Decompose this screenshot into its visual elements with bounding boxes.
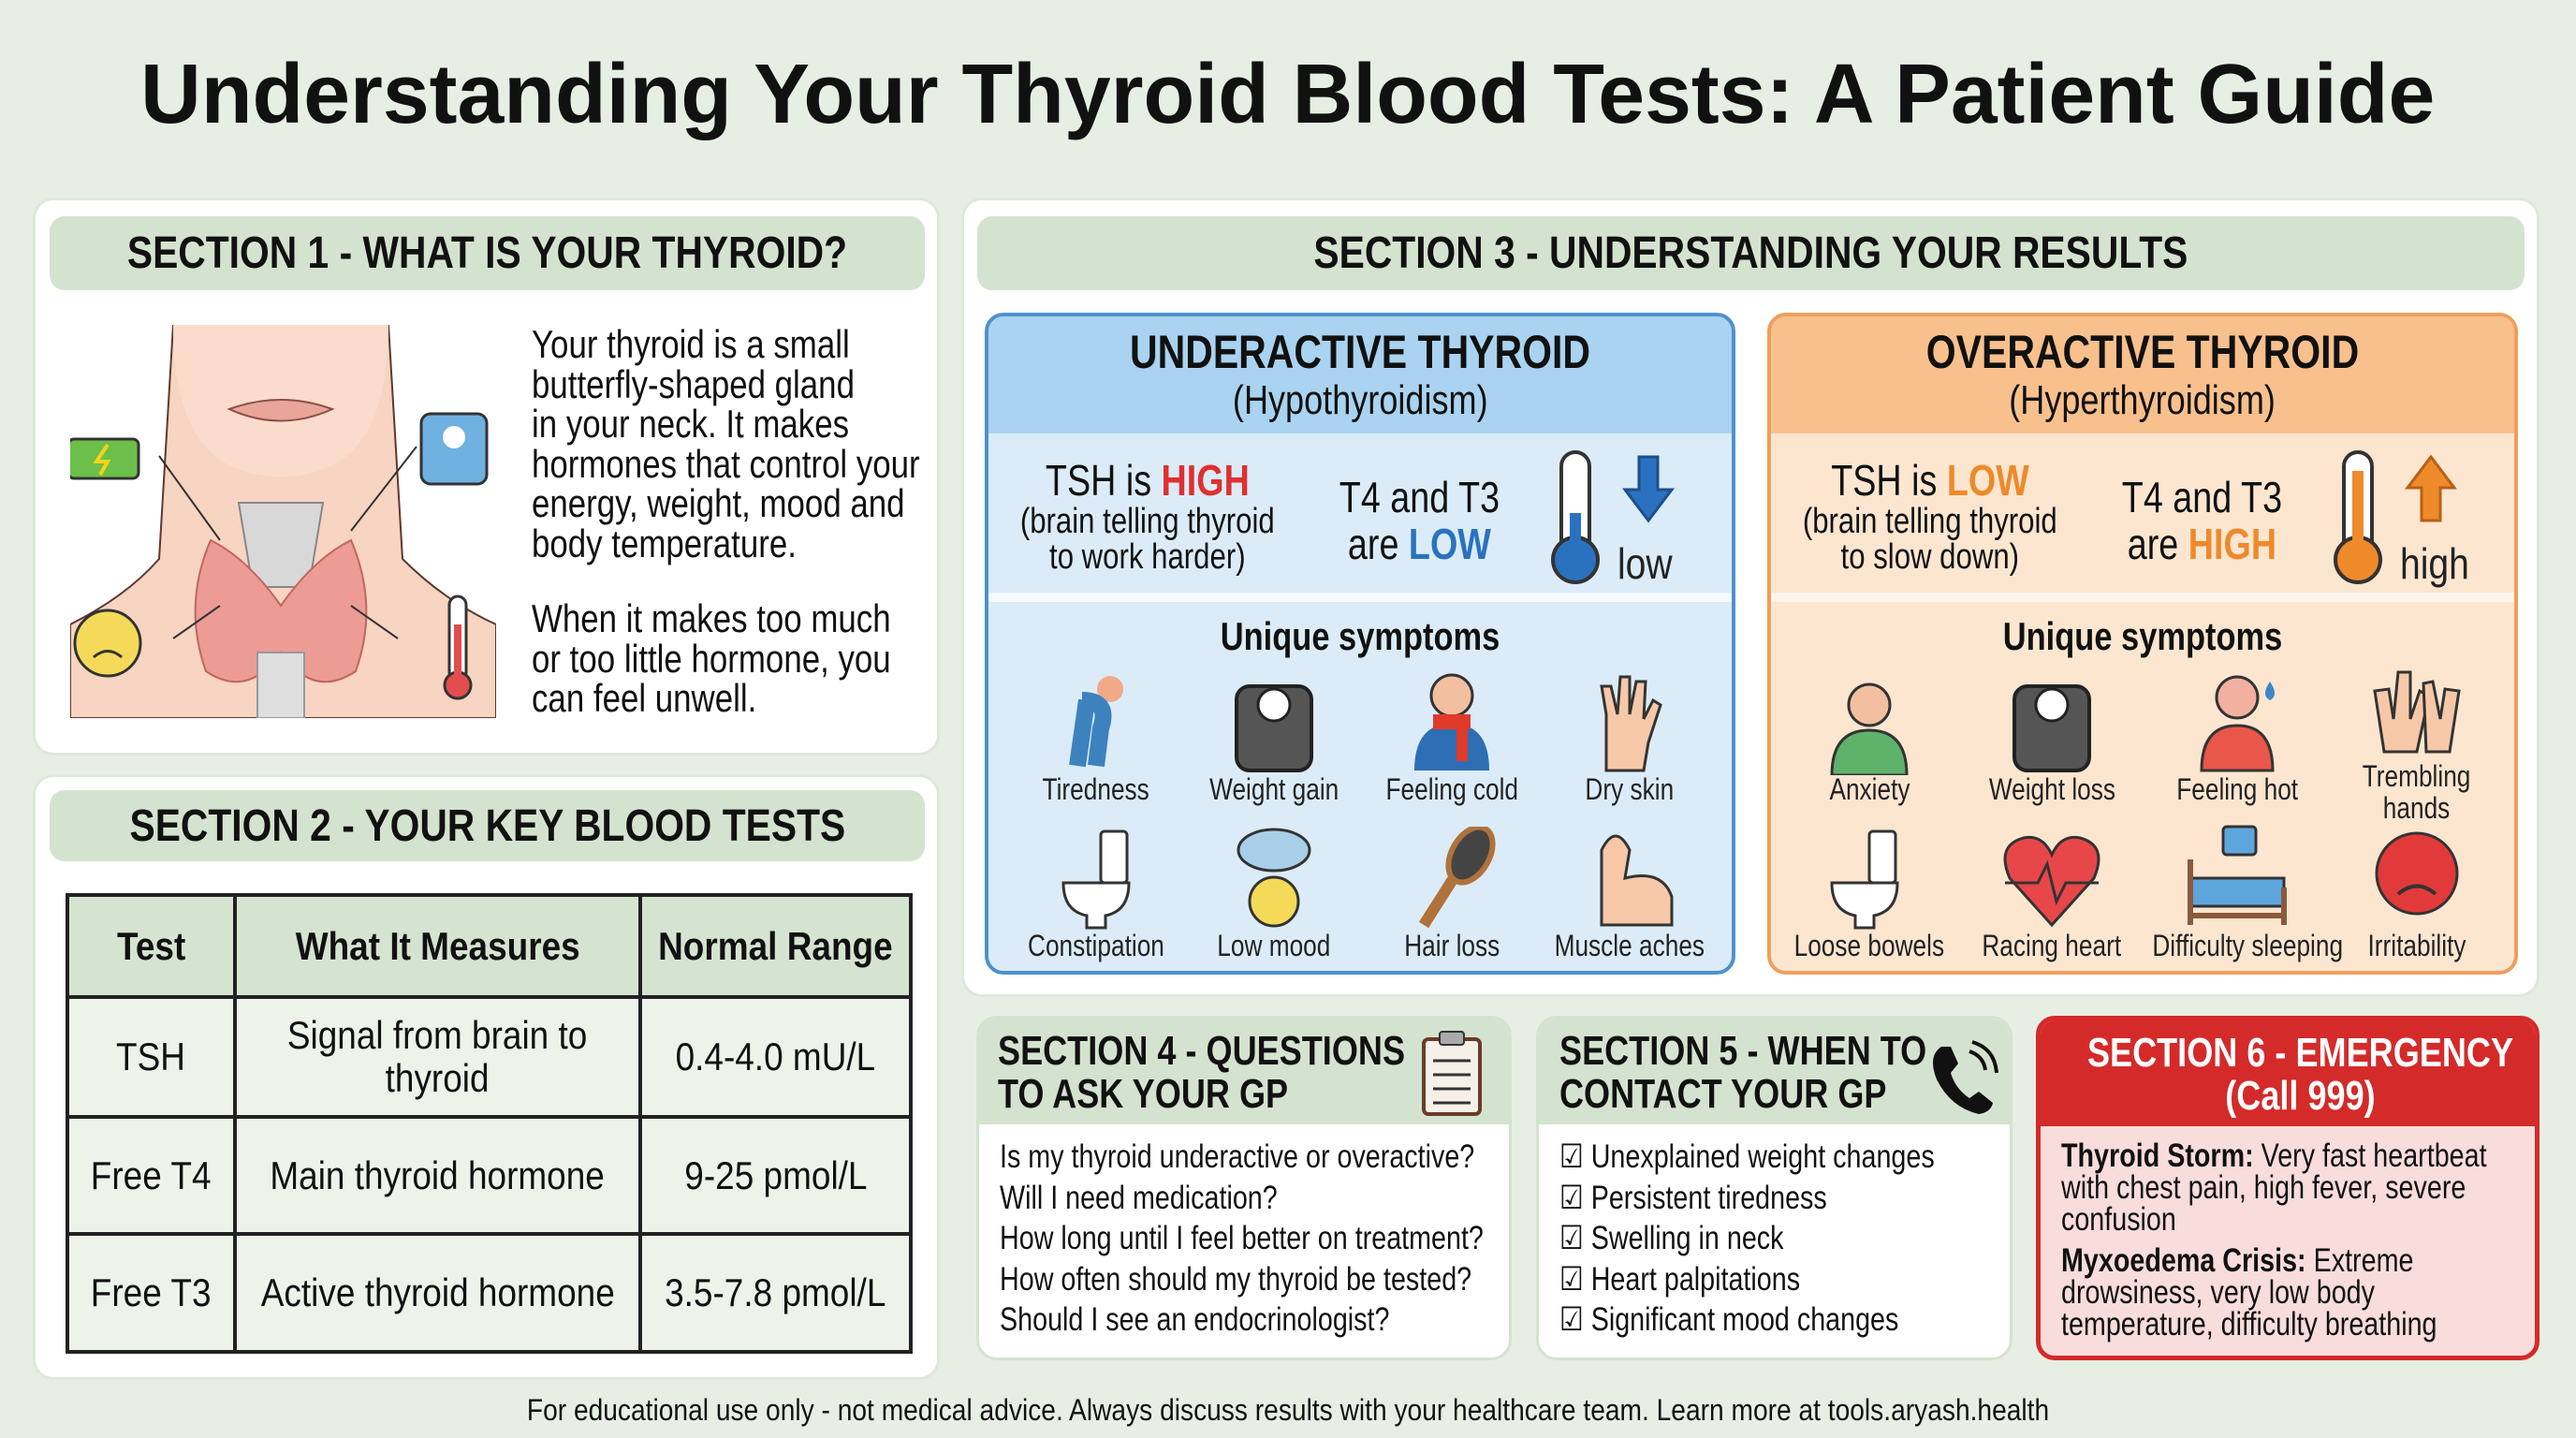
icon: thermometer low with arrow: [1551, 450, 1675, 588]
heading: section 6: SECTION 6 - EMERGENCY: [2087, 1030, 2513, 1076]
list: warning checklist: [1559, 1138, 1935, 1338]
heading: section 5: SECTION 5 - WHEN TO: [1559, 1028, 1926, 1074]
text: questions list: How often should my thyroid be tested?: [1000, 1260, 1471, 1298]
text: TSH low: [1803, 456, 2057, 577]
panel: overactive thyroid: [1767, 313, 2518, 975]
heading: overactive: (Hyperthyroidism): [2010, 377, 2276, 423]
heading: section 1: SECTION 1 - WHAT IS YOUR THYROID?: [127, 228, 847, 278]
panel: section 3: [961, 198, 2539, 997]
heading: unique symptoms: Unique symptoms: [2003, 614, 2282, 658]
icons: underactive symptoms: Muscle aches: [1555, 929, 1705, 962]
text: thyroid description: in your neck. It makes: [532, 402, 849, 446]
text: T4 T3 high: T4 and T3: [2121, 473, 2282, 521]
icons: overactive symptoms: hands: [2383, 791, 2451, 825]
panel: section 5 contact GP: [1536, 1016, 2012, 1360]
text: thyroid description: hormones that control your: [532, 442, 920, 485]
icons: overactive symptoms: [1794, 670, 2471, 962]
table: blood tests: Free T4: [91, 1153, 212, 1196]
list: warning checklist: ☑ Significant mood changes: [1559, 1301, 1898, 1338]
table: blood tests: What It Measures: [296, 923, 579, 968]
text: thyroid description: can feel unwell.: [532, 676, 756, 720]
heading: unique symptoms: Unique symptoms: [1221, 614, 1500, 658]
panel: section 4 questions: [976, 1016, 1512, 1360]
icons: underactive symptoms: Dry skin: [1586, 772, 1674, 806]
text: emergencies: with chest pain, high fever, severe: [2061, 1169, 2466, 1206]
table: blood tests: Normal Range: [658, 923, 893, 968]
text: emergencies: Thyroid Storm: Very fast heartbeat: [2061, 1137, 2487, 1174]
table: blood tests: TSH: [116, 1034, 185, 1078]
heading: underactive: UNDERACTIVE THYROID: [1130, 326, 1590, 378]
text: thyroid description: Your thyroid is a small: [532, 322, 850, 366]
heading: section 3: [977, 216, 2525, 290]
heading: section 5: CONTACT YOUR GP: [1559, 1071, 1886, 1117]
heading: section 1: [50, 216, 925, 290]
table: blood tests: [66, 893, 913, 1354]
icon: phone: [1933, 1040, 1998, 1114]
text: thyroid description: energy, weight, mood and: [532, 481, 905, 525]
text: thyroid description: When it makes too much: [532, 596, 891, 640]
icons: overactive symptoms: Weight loss: [1988, 772, 2115, 806]
text: questions list: Should I see an endocrinologist?: [1000, 1301, 1389, 1338]
list: warning checklist: ☑ Unexplained weight changes: [1559, 1138, 1935, 1175]
heading: section 4: SECTION 4 - QUESTIONS: [998, 1028, 1405, 1074]
icons: overactive symptoms: Feeling hot: [2176, 772, 2298, 806]
text: TSH high: [1020, 456, 1275, 577]
icon: thermometer high with arrow: [2334, 450, 2469, 588]
heading: section 4: TO ASK YOUR GP: [998, 1071, 1288, 1117]
list: warning checklist: ☑ Heart palpitations: [1559, 1260, 1800, 1298]
heading: underactive: (Hypothyroidism): [1233, 377, 1487, 423]
panel: underactive thyroid: [985, 313, 1735, 975]
list: warning checklist: ☑ Persistent tiredness: [1559, 1180, 1827, 1215]
icons: overactive symptoms: Difficulty sleeping: [2152, 929, 2343, 962]
text: questions list: Will I need medication?: [1000, 1180, 1278, 1215]
heading: section 4: [979, 1019, 1509, 1124]
illustration: neck and thyroid: [70, 325, 496, 718]
heading: overactive: [1771, 316, 2514, 433]
table: blood tests: Active thyroid hormone: [260, 1270, 614, 1314]
text: emergencies: drowsiness, very low body: [2061, 1274, 2375, 1311]
text: questions list: Is my thyroid underactive or overactive?: [1000, 1138, 1474, 1175]
heading: overactive: OVERACTIVE THYROID: [1926, 326, 2359, 378]
heading: section 6: (Call 999): [2225, 1073, 2376, 1119]
heading: section 2: [50, 790, 925, 861]
text: questions list: How long until I feel better on treatment?: [1000, 1220, 1484, 1256]
text: T4 T3 low: are LOW: [1348, 520, 1490, 568]
text: T4 T3 high: [2121, 473, 2282, 568]
icons: underactive symptoms: [1028, 674, 1705, 962]
text: thyroid description: [532, 322, 920, 720]
table: blood tests: 3.5-7.8 pmol/L: [665, 1270, 886, 1314]
text: emergencies: [2061, 1137, 2487, 1343]
panel: section 6 emergency: [2036, 1016, 2539, 1360]
text: TSH high: TSH is HIGH: [1046, 456, 1250, 505]
icons: underactive symptoms: Tiredness: [1043, 772, 1149, 806]
panel: section 1: [33, 198, 940, 756]
icons: overactive symptoms: Irritability: [2368, 929, 2466, 962]
heading: section 2: SECTION 2 - YOUR KEY BLOOD TESTS: [129, 801, 845, 850]
icons: underactive symptoms: Feeling cold: [1385, 772, 1518, 806]
icons: underactive symptoms: Hair loss: [1404, 929, 1500, 962]
title: Understanding Your Thyroid Blood Tests: A Patient Guide: [140, 48, 2436, 141]
divider band: [1771, 593, 2514, 602]
icons: underactive symptoms: Low mood: [1217, 929, 1331, 962]
icons: overactive symptoms: Loose bowels: [1794, 929, 1944, 962]
table: blood tests: 9-25 pmol/L: [684, 1153, 867, 1196]
text: TSH high: to work harder): [1049, 537, 1246, 577]
heading: underactive: [988, 316, 1732, 433]
text: questions list: [1000, 1138, 1484, 1338]
icons: underactive symptoms: Weight gain: [1209, 772, 1339, 806]
icons: underactive symptoms: Constipation: [1028, 929, 1164, 962]
panel: section 2: [33, 774, 940, 1380]
text: thyroid description: or too little hormone, you: [532, 637, 891, 680]
table: blood tests: 0.4-4.0 mU/L: [676, 1034, 875, 1078]
text: TSH low: to slow down): [1841, 537, 2019, 577]
heading: section 3: SECTION 3 - UNDERSTANDING YOUR RESULTS: [1314, 228, 2188, 278]
icons: overactive symptoms: Racing heart: [1983, 929, 2121, 962]
text: TSH high: (brain telling thyroid: [1020, 502, 1275, 541]
divider band: [988, 593, 1732, 602]
heading: section 5: [1539, 1019, 2010, 1124]
text: emergencies: temperature, difficulty breathing: [2061, 1306, 2437, 1343]
list: warning checklist: ☑ Swelling in neck: [1559, 1220, 1784, 1256]
icons: overactive symptoms: Anxiety: [1829, 772, 1910, 806]
icon: thermometer low with arrow: low: [1617, 540, 1673, 588]
table: blood tests: thyroid: [386, 1056, 490, 1100]
table: blood tests: Signal from brain to: [287, 1013, 588, 1057]
icon: thermometer high with arrow: high: [2400, 540, 2469, 588]
text: TSH low: (brain telling thyroid: [1803, 502, 2057, 541]
icon: clipboard: [1422, 1031, 1482, 1116]
table: blood tests: Free T3: [91, 1270, 212, 1314]
text: T4 T3 low: [1339, 473, 1500, 568]
table: blood tests: Test: [117, 923, 185, 968]
text: thyroid description: butterfly-shaped gland: [532, 361, 855, 406]
text: T4 T3 low: T4 and T3: [1339, 473, 1500, 521]
text: TSH low: TSH is LOW: [1831, 456, 2029, 505]
text: T4 T3 high: are HIGH: [2127, 520, 2276, 568]
text: thyroid description: body temperature.: [532, 521, 797, 565]
heading: section 6: [2041, 1020, 2535, 1126]
table: blood tests: Main thyroid hormone: [271, 1153, 605, 1196]
text: emergencies: confusion Myxoedema Crisis: Extreme: [2061, 1201, 2413, 1279]
icons: overactive symptoms: Trembling: [2363, 759, 2471, 793]
footer: For educational use only - not medical advice. Always discuss results with your healthcare team. Learn more at tools.aryash.health: [527, 1393, 2049, 1427]
